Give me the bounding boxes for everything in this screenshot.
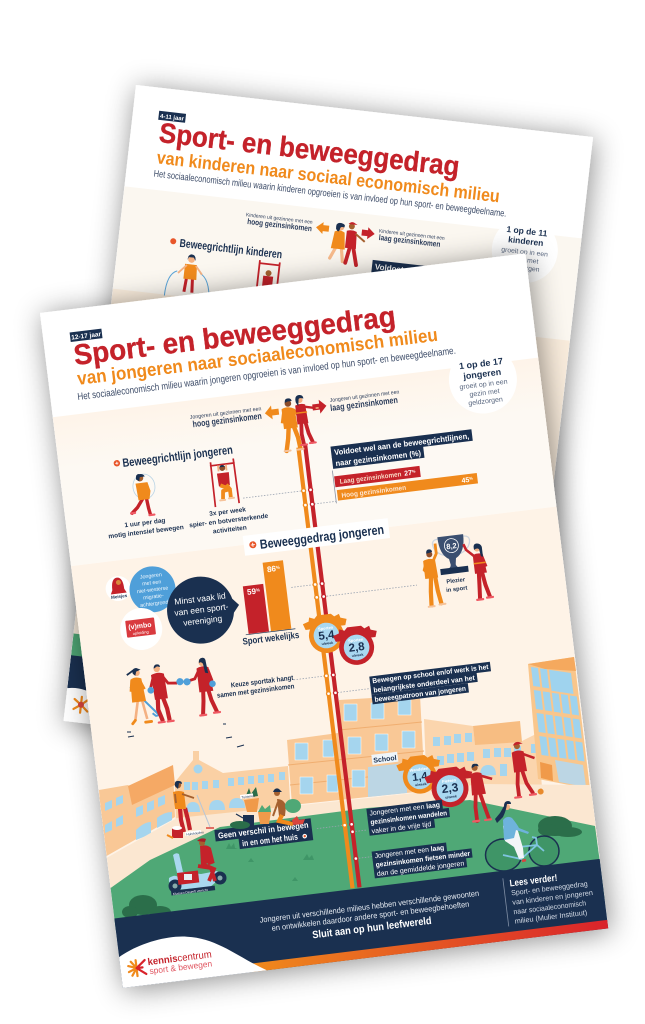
bar chart: Sport wekelijks: 86 — [266, 564, 276, 574]
trophy with score 8,2 — [432, 533, 473, 576]
circle: migratie-achtergrond: migratie- — [143, 593, 164, 602]
caption: 1 uur per dag: 1 uur per dag — [124, 517, 166, 529]
back callout: 1 op de 11 kinderen: geldzorgen — [506, 263, 540, 274]
bar chart: laag en hoog gezinsinkomen: % — [412, 468, 416, 474]
caption: 3x per week: activiteiten — [213, 524, 247, 536]
back label: laag gezinsinkomen — [379, 229, 444, 247]
figure: red person with trophy — [463, 541, 493, 601]
sign: School: School — [373, 755, 397, 765]
text box: Bewegen op school: beweegpatroon van jongeren — [374, 686, 466, 704]
arrow: right red — [312, 399, 327, 414]
text box: wandelen: Jongeren met een laag — [369, 802, 440, 818]
label: hoog gezinsinkomen: hoog gezinsinkomen — [192, 411, 262, 429]
text box: Bewegen op school: Bewegen op school en/of werk is het — [372, 664, 490, 685]
circle: vmbo opleiding: (v)mbo — [128, 622, 152, 632]
figure: woman with mop: Huishouden — [186, 830, 204, 836]
birds — [127, 724, 244, 747]
figure: red person with ball — [508, 739, 544, 798]
Lees verder text: Sport- en beweeggedrag — [511, 879, 588, 897]
logo: kenniscentrum sport & bewegen: sport & bewegen — [149, 958, 213, 976]
back callout: 1 op de 11 kinderen — [492, 226, 558, 282]
speech bubble: Minst vaak lid: Minst vaak lid — [174, 590, 226, 607]
back label: hoog gezinsinkomen: Kinderen uit gezinnen met een — [246, 212, 313, 226]
figure: hockey girl — [126, 667, 159, 724]
front poster sheet and background bands — [40, 253, 608, 988]
building: tall right block — [528, 657, 590, 789]
back poster beige background — [74, 186, 582, 634]
figure: scooter rider — [168, 838, 226, 896]
panel: back poster (4-11 jaar) — [64, 85, 593, 773]
callout: 1 op de 17 jongeren: geldzorgen — [468, 396, 503, 407]
footer band — [114, 859, 608, 988]
caption: 3x per week: 3x per week — [209, 506, 247, 518]
back figures: girl and boy — [329, 220, 367, 266]
subtitle: van jongeren naar sociaaleconomisch milieu — [76, 324, 439, 389]
back arrow: left orange — [316, 222, 330, 234]
text box: Bewegen op school: belangrijkste onderdeel van het — [373, 675, 476, 694]
figure: cyclist — [486, 801, 559, 871]
footer message: Sluit aan op hun leefwereld — [312, 915, 432, 941]
footer message: Jongeren uit verschillende milieus hebben verschillende gewoonten — [259, 889, 480, 925]
figure: orange person with trophy — [421, 543, 446, 607]
stopwatch: wandelen 1,4 — [395, 753, 444, 796]
back poster tagline: Het sociaaleconomisch milieu waarin kinderen opgroeien is van invloed op hun sport- en beweegdeelname. — [153, 169, 507, 220]
stopwatch: wandelen 1,4: u/week — [415, 782, 427, 787]
back poster age badge — [158, 111, 186, 123]
timeline nodes — [301, 488, 358, 862]
caption: 3x per week — [188, 504, 270, 538]
back poster subtitle: van kinderen naar sociaal economisch milieu — [156, 147, 501, 206]
text: Keuze sporttak: Keuze sporttak hangt — [230, 675, 294, 689]
bar chart: laag en hoog gezinsinkomen: Laag gezinsinkomen — [339, 471, 402, 486]
callout: 1 op de 17 jongeren: jongeren — [462, 367, 502, 381]
Lees verder text: van kinderen en jongeren — [512, 888, 593, 907]
grass — [105, 800, 605, 930]
text: Keuze sporttak — [216, 675, 295, 700]
title: Sport- en beweeggedrag — [72, 301, 397, 372]
stopwatch: fietsen 2,3 — [424, 765, 476, 810]
stopwatch: wandelen 1,4: 1,4 — [412, 770, 429, 784]
figure: scooter rider: Klussen Deuerfi verricht — [173, 888, 208, 896]
figure: pull-up bars — [209, 458, 240, 507]
circle: migratie-achtergrond: niet-westerse — [137, 585, 169, 595]
Lees verder text — [509, 869, 596, 926]
chart title: Voldoet wel: naar gezinsinkomen (%) — [335, 449, 422, 468]
text box: fietsen: dan de gemiddelde jongeren — [377, 860, 465, 878]
Lees verder text: Lees verder! — [509, 873, 558, 889]
tagline: Het sociaaleconomisch milieu waarin jongeren opgroeien is van invloed op hun sport- en beweegdeelname. — [77, 346, 456, 403]
stopwatch: sporten 5,4: Sporten — [318, 625, 334, 631]
back poster grass and footer — [67, 634, 86, 691]
circle: Meisjes: Meisjes — [111, 593, 128, 600]
logo: kenniscentrum sport & bewegen — [127, 949, 213, 979]
figure: gardener and plants — [230, 787, 305, 829]
grass tufts — [226, 844, 314, 881]
building: middle block — [424, 719, 542, 796]
text box: Geen verschil: Geen verschil in bewegen — [217, 820, 309, 841]
stopwatch: sporten 2,8: u/week — [352, 653, 364, 658]
back label: laag gezinsinkomen: laag gezinsinkomen — [378, 233, 441, 249]
bar chart: Sport wekelijks: % — [275, 565, 280, 570]
back heading: Beweegrichtlijn kinderen — [170, 238, 282, 258]
bush left — [122, 895, 171, 918]
label: laag gezinsinkomen: Jongeren uit gezinnen met een — [330, 390, 400, 404]
circle: Meisjes — [104, 575, 132, 602]
speech bubble: Minst vaak lid: vereniging — [183, 613, 223, 628]
building: gabled block — [175, 751, 290, 819]
figure: red woman behind stopwatch — [466, 762, 497, 821]
heading: Beweegrichtlijn jongeren: Beweegrichtlijn jongeren — [122, 443, 234, 470]
text box: Bewegen op school — [369, 662, 493, 704]
callout: 1 op de 17 jongeren: groeit op in een — [459, 379, 508, 391]
stopwatch: fietsen 2,3: Fietsen — [442, 777, 457, 784]
callout: 1 op de 17 jongeren: gezin met — [469, 388, 500, 399]
front poster local-coordinate content — [43, 276, 608, 988]
building: left block — [99, 765, 175, 858]
back logo star — [73, 696, 89, 713]
bar chart: laag en hoog gezinsinkomen: % — [469, 475, 473, 481]
circle: vmbo opleiding — [118, 606, 165, 652]
bar chart: Sport wekelijks: % — [256, 587, 260, 593]
text box: fietsen: Jongeren met een laag — [374, 845, 445, 860]
circle: migratie-achtergrond: Jongeren — [140, 572, 162, 581]
text box: fietsen: gezinsinkomen fietsen minder — [375, 851, 471, 869]
circle: migratie-achtergrond — [127, 564, 178, 615]
stopwatch: sporten 2,8 — [332, 624, 381, 667]
bar chart: laag en hoog gezinsinkomen: 27 — [404, 470, 413, 478]
building: school main — [287, 695, 425, 805]
back poster age badge: 4-11 jaar — [160, 114, 185, 123]
Lees verder text: naar sociaaleconomisch — [513, 898, 587, 916]
back navy chart title: Voldoet wel aan de — [374, 262, 447, 279]
callout: 1 op de 17 jongeren: 1 op de 17 — [459, 356, 503, 371]
speech bubble: Minst vaak lid: van een sport- — [174, 601, 229, 618]
back callout: 1 op de 11 kinderen: kinderen — [508, 234, 544, 248]
bar chart: Sport wekelijks: Sport wekelijks — [242, 630, 300, 648]
back label: laag gezinsinkomen: Kinderen uit gezinnen met een — [379, 228, 445, 242]
bar chart: laag en hoog gezinsinkomen: Hoog gezinsinkomen — [341, 485, 407, 500]
text box: wandelen: gezinsinkomen wandelen — [370, 810, 447, 826]
panel: front poster (12-17 jaar) — [40, 253, 608, 988]
text box: Geen verschil — [214, 818, 313, 852]
gradient strip — [251, 920, 608, 972]
back callout: 1 op de 11 kinderen: 1 op de 11 — [506, 224, 548, 239]
caption: 3x per week: spier- en botversterkende — [189, 513, 269, 529]
back label: hoog gezinsinkomen — [246, 212, 312, 232]
stopwatch: sporten 5,4: 5,4 — [318, 629, 336, 643]
logo white area — [117, 926, 267, 988]
text box: wandelen — [366, 799, 451, 836]
back poster title: Sport- en beweeggedrag — [158, 117, 461, 182]
bar chart: laag en hoog gezinsinkomen: 45 — [461, 477, 470, 485]
figure: gardener and plants: Tuinieren — [241, 794, 255, 799]
back arrow: right red — [361, 227, 375, 240]
back callout: 1 op de 11 kinderen: gezin met — [509, 255, 539, 266]
figure: boxer one — [144, 661, 188, 723]
back callout: 1 op de 11 kinderen: groeit op in een — [501, 246, 548, 259]
orange and red timeline lines — [296, 443, 362, 888]
chart title: Voldoet wel: Voldoet wel aan de beweegrichtlijnen, — [334, 432, 470, 457]
logo: kenniscentrum sport & bewegen: kenniscentrum — [147, 949, 212, 968]
trophy with score 8,2: 8,2 — [446, 541, 457, 551]
stopwatch: sporten 2,8: Sporten — [348, 636, 364, 643]
heading: Beweegrichtlijn jongeren — [113, 443, 234, 471]
back figure: pull-up frame — [256, 260, 281, 286]
text: Plezier in sport — [445, 577, 468, 594]
text box: wandelen: vaker in de vrije tijd — [371, 821, 432, 835]
callout: 1 op de 17 jongeren — [445, 342, 521, 417]
dotted connectors — [243, 478, 449, 867]
text box: Geen verschil: in en om het huis — [242, 832, 299, 848]
text: Plezier in sport: in sport — [446, 585, 468, 594]
back heading: Beweegrichtlijn kinderen: Beweegrichtlijn kinderen — [179, 238, 283, 261]
figures: orange boy and red girl at top of lines — [278, 393, 323, 451]
caption: 1 uur per dag: motig intensief bewegen — [108, 524, 184, 540]
bush right — [538, 816, 582, 837]
label: laag gezinsinkomen: laag gezinsinkomen — [330, 395, 398, 413]
back figure: jump rope girl — [164, 254, 210, 296]
figure: jump rope — [126, 472, 158, 517]
text: Plezier in sport: Plezier — [446, 577, 466, 585]
label: hoog gezinsinkomen: Jongeren uit gezinnen met een — [190, 406, 262, 421]
stopwatch: wandelen 1,4: Wandelen — [409, 766, 429, 773]
bar chart: Sport wekelijks — [233, 559, 300, 648]
bar chart: Sport wekelijks: 59 — [247, 587, 257, 597]
plaza — [103, 784, 600, 890]
stopwatch: fietsen 2,3: u/week — [445, 794, 457, 800]
back navy chart title — [371, 260, 426, 272]
stopwatch: fietsen 2,3: 2,3 — [441, 780, 459, 796]
figure: boxer two — [181, 656, 220, 717]
bar chart: laag en hoog gezinsinkomen — [332, 453, 478, 503]
chart title: Voldoet wel — [330, 429, 474, 469]
stopwatch: sporten 5,4 — [302, 612, 350, 656]
scene figures over grass — [167, 781, 559, 896]
footer message — [259, 889, 482, 948]
Lees verder text: milieu (Mulier Instituut) — [514, 908, 588, 926]
figure: woman with mop — [167, 781, 214, 838]
circle: migratie-achtergrond: achtergrond — [140, 600, 169, 609]
heading: Beweeggedrag jongeren: Beweeggedrag jongeren — [259, 522, 385, 552]
footer message: en ontwikkelen daardoor andere sport- en beweegbehoeften — [271, 900, 470, 933]
text box: fietsen — [372, 839, 474, 878]
caption: 1 uur per dag — [107, 515, 184, 540]
arrow: left orange — [264, 405, 280, 420]
text: Keuze sporttak: samen met gezinsinkomen — [217, 683, 295, 700]
divider — [503, 878, 509, 926]
sign: School — [371, 752, 398, 765]
circle: migratie-achtergrond: met een — [142, 579, 162, 588]
scene: buildings, plaza and grass — [99, 657, 605, 930]
stopwatch: sporten 2,8: 2,8 — [348, 641, 366, 655]
age badge: 12-17 jaar — [71, 331, 102, 342]
stopwatch: sporten 5,4: u/week — [321, 641, 333, 646]
circle: vmbo opleiding: opleiding — [132, 629, 149, 636]
back label: hoog gezinsinkomen: hoog gezinsinkomen — [247, 217, 312, 233]
speech bubble: Minst vaak lid — [163, 572, 243, 647]
